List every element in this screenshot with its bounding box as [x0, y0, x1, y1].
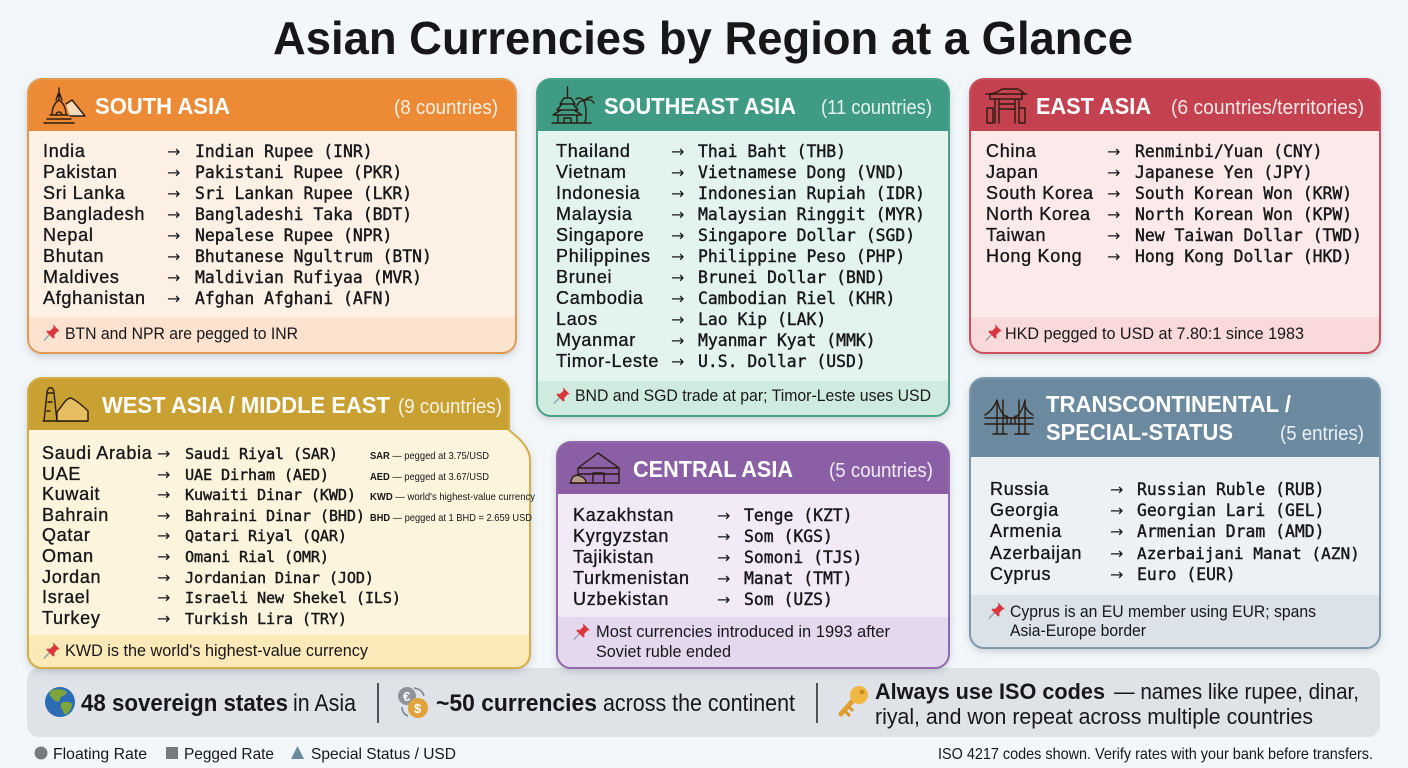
currency list: Armenian Dram (AMD): [1137, 522, 1324, 541]
side notes on pegs: AED — pegged at 3.67/USD: [370, 471, 489, 483]
currency list: Turkey: [42, 608, 101, 628]
currency list: India: [43, 141, 86, 161]
currency list: Bhutan: [43, 246, 104, 266]
currency list: Maldivian Rufiyaa (MVR): [195, 268, 422, 287]
currency list: Thailand: [556, 141, 631, 161]
country count: (5 countries): [829, 460, 933, 482]
currency list: Brunei Dollar (BND): [698, 268, 886, 287]
currency list: Laos: [556, 309, 598, 329]
currency list: Som (UZS): [744, 590, 833, 609]
heading: Transcontinental: SPECIAL-STATUS: [1046, 419, 1233, 445]
currency list: Tenge (KZT): [744, 506, 853, 525]
currency list: Cambodia: [556, 288, 644, 308]
currency list: Cambodian Riel (KHR): [698, 289, 895, 308]
currency list: →: [717, 590, 730, 609]
currency list: [986, 141, 1362, 266]
side notes on pegs: [370, 450, 536, 524]
currency list: Vietnam: [556, 162, 627, 182]
note: KWD is the world's highest-value currency: [65, 641, 368, 660]
icon: key: [841, 686, 868, 716]
currency list: Turkmenistan: [573, 568, 690, 588]
currency list: Lao Kip (LAK): [698, 310, 826, 329]
currency list: →: [717, 548, 730, 567]
currency list: Saudi Arabia: [42, 443, 153, 463]
currency list: U.S. Dollar (USD): [698, 352, 866, 371]
currency list: Azerbaijani Manat (AZN): [1137, 544, 1360, 563]
currency list: Turkish Lira (TRY): [185, 610, 347, 628]
note: [1010, 602, 1316, 640]
currency list: →: [157, 465, 170, 484]
currency list: Pakistani Rupee (PKR): [195, 163, 402, 182]
tip: ISO codes: — names like rupee, dinar,: [1114, 679, 1359, 704]
currency list: Brunei: [556, 267, 612, 287]
currency list: →: [167, 205, 180, 224]
panel: West Asia / Middle East: [28, 378, 536, 668]
currency list: Armenia: [990, 521, 1062, 541]
currency list: Philippine Peso (PHP): [698, 247, 905, 266]
currency list: Bahraini Dinar (BHD): [185, 507, 365, 525]
currency list: Kyrgyzstan: [573, 526, 669, 546]
currency list: →: [167, 247, 180, 266]
currency list: Vietnamese Dong (VND): [698, 163, 905, 182]
currency list: Thai Baht (THB): [698, 142, 846, 161]
currency list: Sri Lanka: [43, 183, 126, 203]
currency list: →: [671, 310, 684, 329]
currency list: →: [1110, 501, 1123, 520]
note: Soviet ruble ended: [596, 642, 731, 661]
currency list: →: [1107, 163, 1120, 182]
footnote: ISO 4217 codes shown. Verify rates with your bank before transfers.: [938, 746, 1373, 763]
heading: Southeast Asia: SOUTHEAST ASIA: [604, 93, 796, 119]
currency list: Saudi Riyal (SAR): [185, 445, 338, 463]
note: BTN and NPR are pegged to INR: [65, 324, 298, 343]
stat: currencies: ~50 currencies: [436, 690, 597, 717]
currency list: Singapore Dollar (SGD): [698, 226, 915, 245]
currency list: →: [671, 247, 684, 266]
currency list: →: [157, 485, 170, 504]
currency list: Japanese Yen (JPY): [1135, 163, 1313, 182]
icon: pin: [554, 387, 570, 404]
currency list: →: [1107, 205, 1120, 224]
currency list: →: [157, 506, 170, 525]
currency list: →: [1110, 565, 1123, 584]
heading: Transcontinental: [1046, 391, 1292, 445]
currency list: →: [1110, 544, 1123, 563]
currency list: →: [671, 163, 684, 182]
currency list: Kazakhstan: [573, 505, 674, 525]
side notes on pegs: SAR — pegged at 3.75/USD: [370, 450, 489, 462]
currency list: →: [717, 527, 730, 546]
stat: sovereign states: in Asia: [293, 690, 357, 717]
currency list: →: [167, 163, 180, 182]
icon: pin: [44, 324, 60, 341]
summary bar: [27, 668, 1380, 737]
icon: globe: [45, 687, 75, 717]
currency list: →: [167, 289, 180, 308]
currency list: →: [167, 184, 180, 203]
currency list: Myanmar: [556, 330, 636, 350]
heading: Transcontinental: TRANSCONTINENTAL /: [1046, 391, 1292, 417]
currency list: →: [1107, 247, 1120, 266]
currency list: South Korea: [986, 183, 1094, 203]
currency list: Hong Kong Dollar (HKD): [1135, 247, 1352, 266]
currency list: Jordanian Dinar (JOD): [185, 569, 374, 587]
currency list: Malaysian Ringgit (MYR): [698, 205, 925, 224]
currency list: [43, 141, 432, 308]
currency list: UAE Dirham (AED): [185, 466, 329, 484]
panel: South Asia: [28, 79, 516, 353]
currency list: South Korean Won (KRW): [1135, 184, 1352, 203]
currency list: Japan: [986, 162, 1039, 182]
currency list: Jordan: [42, 567, 101, 587]
currency list: Russia: [990, 479, 1050, 499]
currency list: →: [167, 142, 180, 161]
currency list: →: [167, 226, 180, 245]
panel: East Asia: [970, 79, 1380, 353]
currency list: Oman: [42, 546, 94, 566]
currency list: Bhutanese Ngultrum (BTN): [195, 247, 432, 266]
currency list: Indonesia: [556, 183, 641, 203]
stat: sovereign states: 48 sovereign states: [81, 690, 288, 717]
legend: pegged rate: Pegged Rate: [184, 746, 274, 763]
heading: South Asia: SOUTH ASIA: [95, 93, 230, 119]
icon: currency exchange: [398, 687, 428, 718]
currency list: Euro (EUR): [1137, 565, 1236, 584]
currency list: Renminbi/Yuan (CNY): [1135, 142, 1322, 161]
currency list: Cyprus: [990, 564, 1051, 584]
currency list: Bangladesh: [43, 204, 145, 224]
currency list: Bahrain: [42, 505, 109, 525]
currency list: UAE: [42, 464, 81, 484]
currency list: →: [671, 184, 684, 203]
currency list: Kuwaiti Dinar (KWD): [185, 486, 356, 504]
icon: paifang gate: [986, 89, 1027, 123]
icon: pin: [574, 623, 590, 640]
icon: pagoda and palm: [552, 87, 594, 123]
currency list: →: [157, 526, 170, 545]
icon: pin: [44, 642, 60, 659]
currency list: →: [1107, 142, 1120, 161]
currency list: New Taiwan Dollar (TWD): [1135, 226, 1362, 245]
currency list: →: [671, 331, 684, 350]
currency list: Israeli New Shekel (ILS): [185, 589, 401, 607]
currency list: →: [671, 226, 684, 245]
currency list: Qatari Riyal (QAR): [185, 527, 347, 545]
panel: Central Asia: [557, 442, 949, 668]
currency list: Hong Kong: [986, 246, 1082, 266]
legend: special status: Special Status / USD: [311, 746, 456, 763]
panel: Transcontinental / Special-Status: [970, 378, 1380, 648]
currency list: →: [671, 289, 684, 308]
country count: (8 countries): [394, 97, 498, 119]
currency list: Kuwait: [42, 484, 100, 504]
legend: floating rate: Floating Rate: [53, 746, 147, 763]
legend: [34, 746, 456, 763]
note: Most currencies introduced in 1993 after: [596, 622, 890, 641]
currency list: Georgian Lari (GEL): [1137, 501, 1324, 520]
currency list: Nepalese Rupee (NPR): [195, 226, 392, 245]
currency list: Azerbaijan: [990, 543, 1082, 563]
currency list: →: [717, 569, 730, 588]
currency list: →: [167, 268, 180, 287]
entry count: (5 entries): [1280, 423, 1364, 445]
icon: currency exchange: $: [414, 701, 422, 716]
currency list: Pakistan: [43, 162, 118, 182]
currency list: Omani Rial (OMR): [185, 548, 329, 566]
stat: currencies: [436, 690, 795, 717]
title: Asian Currencies by Region at a Glance: [273, 12, 1133, 64]
icon: yurt: [570, 453, 619, 483]
side notes on pegs: BHD — pegged at 1 BHD = 2.659 USD: [370, 512, 532, 524]
note: BND and SGD trade at par; Timor-Leste uses USD: [575, 386, 931, 405]
currency list: Indonesian Rupiah (IDR): [698, 184, 925, 203]
heading: East Asia: EAST ASIA: [1036, 93, 1151, 119]
icon: stupa and mountains: [44, 88, 85, 123]
heading: West Asia: WEST ASIA / MIDDLE EAST: [102, 392, 390, 418]
side notes on pegs: KWD — world's highest-value currency: [370, 491, 536, 503]
currency list: [990, 479, 1360, 584]
territory count: (6 countries/territories): [1171, 97, 1364, 119]
tip: ISO codes: [875, 679, 1359, 729]
currency list: Som (KGS): [744, 527, 833, 546]
currency list: [42, 443, 401, 628]
note: Cyprus is an EU member using EUR; spans: [1010, 602, 1316, 621]
currency list: →: [157, 568, 170, 587]
currency list: Taiwan: [986, 225, 1046, 245]
currency list: →: [1110, 522, 1123, 541]
icon: pin: [989, 602, 1005, 619]
currency list: →: [157, 444, 170, 463]
tip: ISO codes: Always use ISO codes: [875, 679, 1105, 704]
currency list: Israel: [42, 587, 90, 607]
tip: ISO codes: riyal, and won repeat across multiple countries: [875, 704, 1313, 729]
country count: (9 countries): [398, 396, 502, 418]
currency list: Afghanistan: [43, 288, 146, 308]
currency list: Indian Rupee (INR): [195, 142, 373, 161]
currency list: →: [1107, 226, 1120, 245]
currency list: [573, 505, 862, 609]
currency list: →: [1107, 184, 1120, 203]
currency list: Nepal: [43, 225, 94, 245]
currency list: Qatar: [42, 525, 91, 545]
currency list: →: [157, 547, 170, 566]
currency list: Uzbekistan: [573, 589, 669, 609]
currency list: Manat (TMT): [744, 569, 853, 588]
currency list: →: [157, 588, 170, 607]
currency list: →: [1110, 480, 1123, 499]
currency list: Myanmar Kyat (MMK): [698, 331, 876, 350]
currency list: Singapore: [556, 225, 644, 245]
currency list: Somoni (TJS): [744, 548, 862, 567]
currency list: Philippines: [556, 246, 651, 266]
icon: currency exchange: €: [403, 689, 410, 704]
note: HKD pegged to USD at 7.80:1 since 1983: [1005, 324, 1304, 343]
currency list: [556, 141, 925, 371]
country count: (11 countries): [821, 97, 932, 119]
note: [596, 622, 890, 661]
currency list: →: [157, 609, 170, 628]
icon: minaret and dunes: [43, 388, 88, 421]
currency list: →: [671, 205, 684, 224]
currency list: →: [671, 142, 684, 161]
currency list: Malaysia: [556, 204, 633, 224]
stat: currencies: across the continent: [603, 690, 795, 717]
currency list: Maldives: [43, 267, 120, 287]
currency list: Bangladeshi Taka (BDT): [195, 205, 412, 224]
currency list: Georgia: [990, 500, 1059, 520]
note: Asia-Europe border: [1010, 621, 1146, 640]
currency list: Russian Ruble (RUB): [1137, 480, 1324, 499]
currency list: →: [717, 506, 730, 525]
currency list: Timor-Leste: [556, 351, 659, 371]
currency list: Sri Lankan Rupee (LKR): [195, 184, 412, 203]
currency list: Tajikistan: [573, 547, 654, 567]
icon: pin: [986, 324, 1002, 341]
icon: suspension bridge: [985, 400, 1033, 434]
currency list: North Korean Won (KPW): [1135, 205, 1352, 224]
currency list: China: [986, 141, 1037, 161]
currency list: →: [671, 352, 684, 371]
currency list: →: [671, 268, 684, 287]
currency list: Afghan Afghani (AFN): [195, 289, 392, 308]
panel: Southeast Asia: [537, 79, 949, 416]
heading: Central Asia: CENTRAL ASIA: [633, 456, 793, 482]
currency list: North Korea: [986, 204, 1091, 224]
